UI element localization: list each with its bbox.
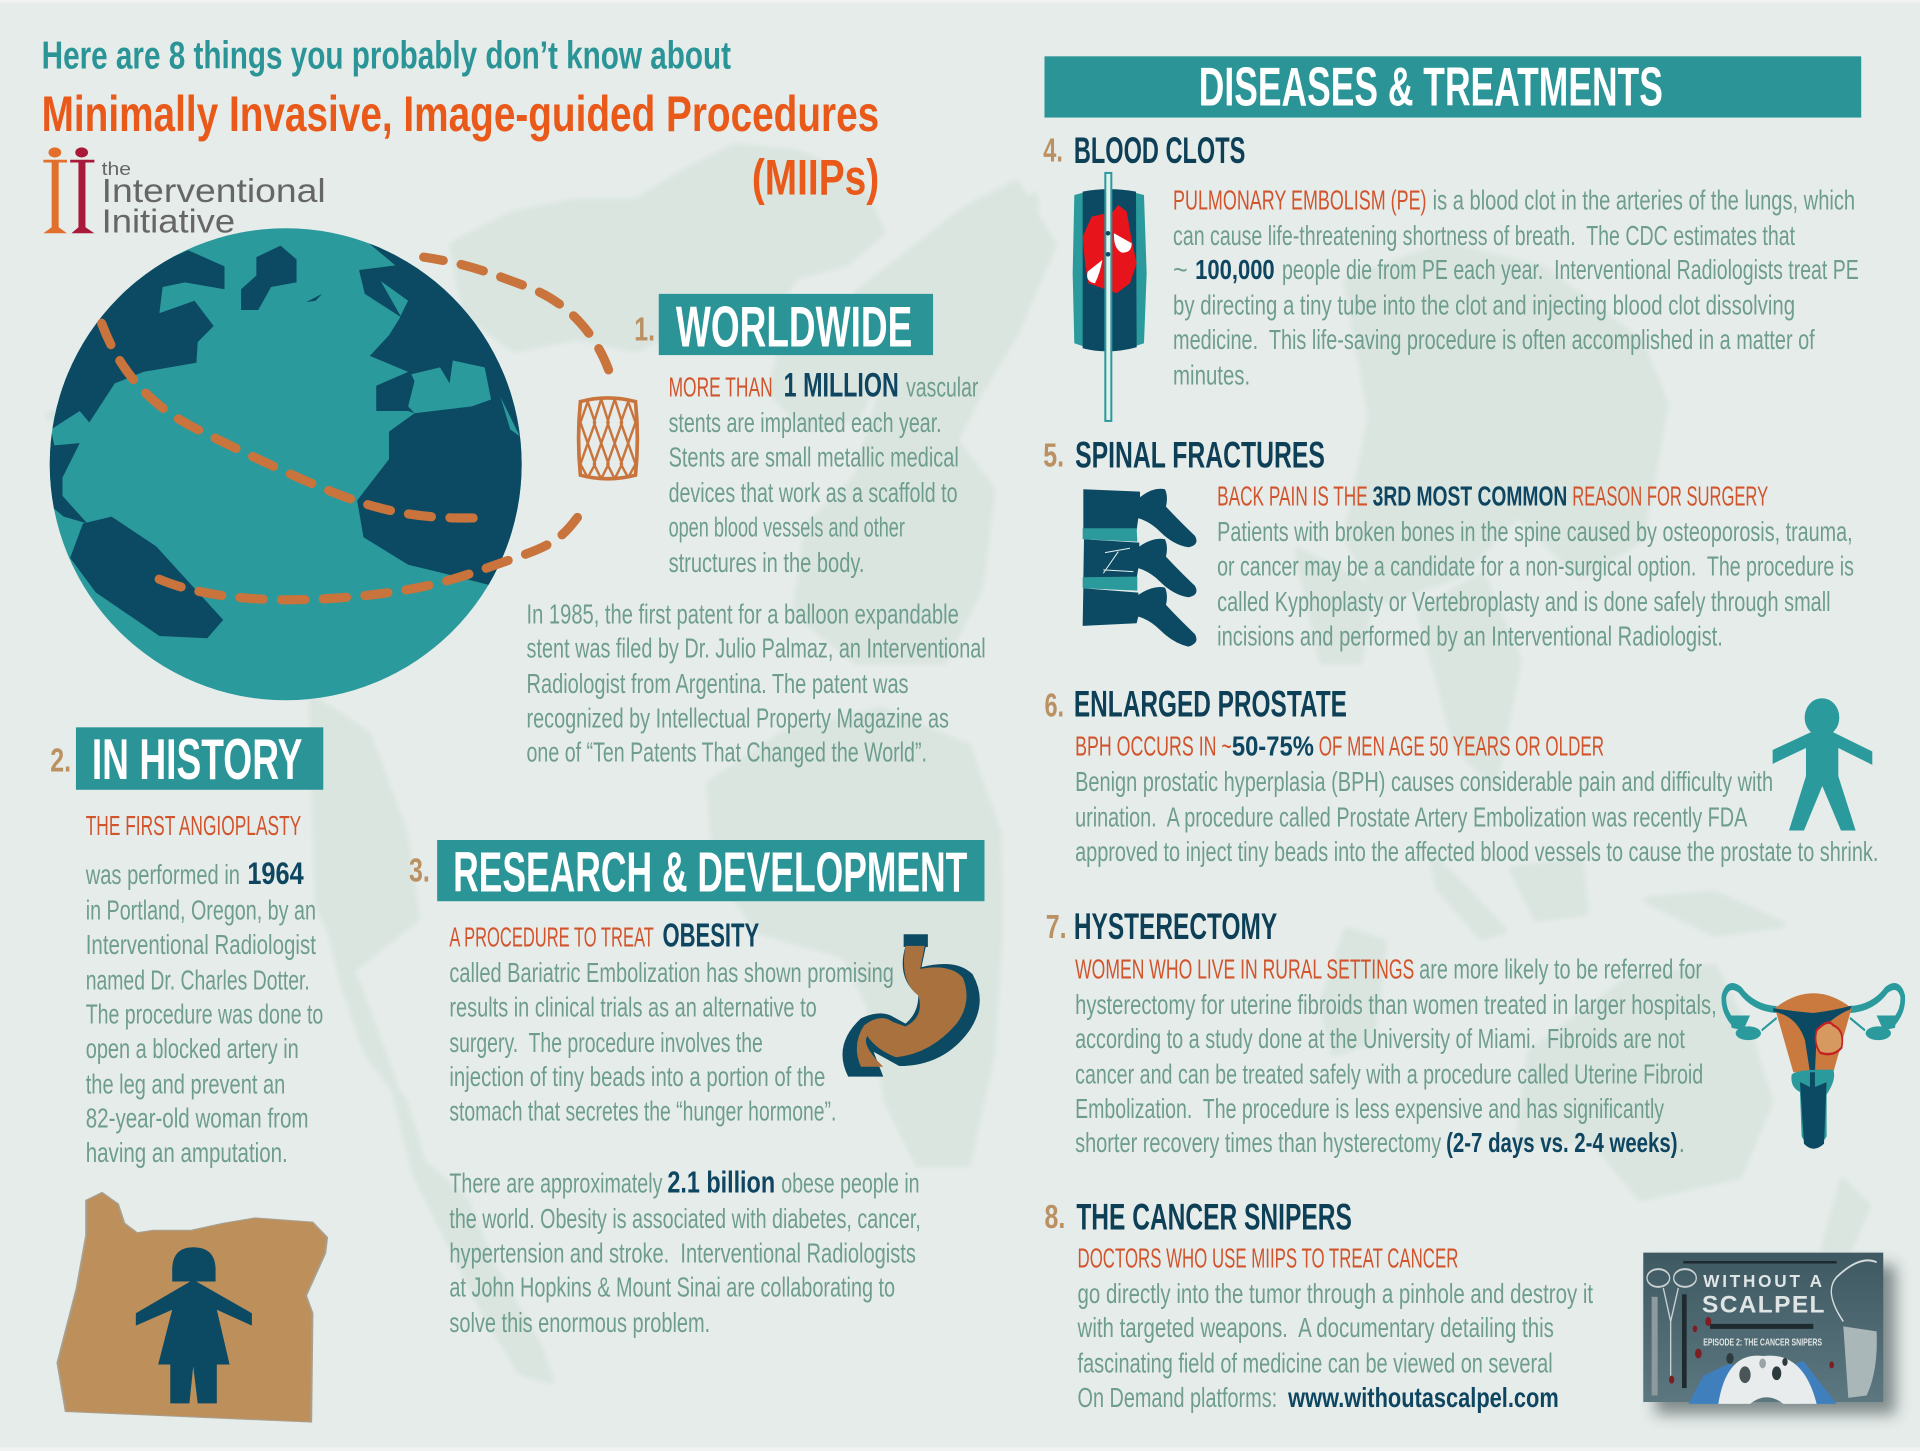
text block: rural settings: shorter recovery times than hysterectomy (1075, 1127, 1441, 1158)
text block: rural settings: . (1679, 1127, 1685, 1158)
text block: 2.1 billion: 2.1 billion (667, 1166, 775, 1200)
text block: back pain: REASON FOR SURGERY (1572, 481, 1768, 512)
text block: 2.1 billion: obese people in (781, 1168, 920, 1199)
logo: the Interventional Initiative: Interventional (102, 173, 326, 210)
banner: research and development: RESEARCH & DEVELOPMENT (453, 840, 967, 903)
icon: stomach (842, 934, 980, 1077)
icon: Oregon with woman figure (57, 1192, 327, 1422)
text block: stents: vascular (906, 372, 978, 403)
text block: angioplasty history: 82-year-old woman from (86, 1103, 309, 1134)
text block: angioplasty history (85, 855, 323, 1168)
panel: hysterectomy (1046, 906, 1903, 1158)
title line 3: (MIIPs) (752, 150, 879, 206)
text block: 2.1 billion: solve this enormous problem. (449, 1307, 710, 1338)
heading 6: ENLARGED PROSTATE (1074, 683, 1347, 724)
text block: documentary: DOCTORS WHO USE MIIPS TO TREAT CANCER (1078, 1242, 1458, 1273)
banner: in history (76, 727, 323, 792)
logo: the Interventional Initiative: the (102, 158, 131, 179)
heading 8 (1044, 1196, 1352, 1237)
text block: 2.1 billion: hypertension and stroke. Interventional Radiologists (449, 1237, 916, 1268)
text block: rural settings: (2-7 days vs. 2-4 weeks) (1446, 1127, 1678, 1158)
text block: documentary: On Demand platforms: (1078, 1382, 1277, 1413)
globe with stent route (26, 220, 609, 700)
text block: stents: MORE THAN (669, 372, 773, 403)
text block: pulmonary embolism (1173, 184, 1859, 390)
text block: documentary: fascinating field of medicine can be viewed on several (1078, 1348, 1553, 1379)
heading 6 (1044, 683, 1347, 724)
title block (42, 35, 879, 206)
heading 7: 7. (1046, 909, 1067, 946)
title line 2: Minimally Invasive, Image-guided Procedures (42, 86, 879, 142)
text block: 1985 patent: Radiologist from Argentina. The patent was (527, 668, 909, 699)
title line 1: Here are 8 things you probably don’t know about (42, 35, 731, 78)
text block: documentary: www.withoutascalpel.com (1287, 1382, 1559, 1413)
text block: rural settings (1075, 953, 1717, 1158)
text block: rural settings: WOMEN WHO LIVE IN RURAL SETTINGS (1075, 953, 1414, 984)
text block: pulmonary embolism: minutes. (1173, 359, 1250, 390)
text block: 2.1 billion: the world. Obesity is associated with diabetes, cancer, (449, 1203, 921, 1234)
section number 2: 2. (50, 742, 71, 779)
subhead: obesity: OBESITY (662, 918, 759, 955)
icon: catheter in clot (1073, 173, 1147, 421)
text block: angioplasty history: Interventional Radiologist (86, 929, 316, 960)
icon: spine (1083, 489, 1196, 647)
panel: spinal fractures (1043, 435, 1854, 651)
text block: bariatric embolization: results in clinical trials as an alternative to (449, 991, 817, 1022)
heading 4 (1043, 130, 1245, 171)
heading 7: HYSTERECTOMY (1074, 906, 1277, 947)
text block: stents: devices that work as a scaffold to (669, 477, 958, 508)
text block: angioplasty history: the leg and prevent an (86, 1068, 285, 1099)
documentary poster: Without a Scalpel: EPISODE 2: THE CANCER SNIPERS (1703, 1338, 1822, 1349)
panel: diseases and treatments banner: DISEASES & TREATMENTS (1199, 55, 1663, 117)
subhead: obesity: A PROCEDURE TO TREAT (449, 922, 654, 953)
text block: pulmonary embolism: 100,000 (1195, 254, 1275, 285)
documentary poster: Without a Scalpel (1643, 1253, 1895, 1414)
logo: the Interventional Initiative: Initiative (102, 204, 235, 241)
text block: stents (669, 367, 978, 578)
documentary poster: Without a Scalpel: SCALPEL (1702, 1292, 1825, 1319)
panel: enlarged prostate (1044, 683, 1878, 867)
text block: bariatric embolization: surgery. The procedure involves the (449, 1027, 763, 1058)
text block: 1985 patent: one of “Ten Patents That Changed the World”. (527, 737, 927, 768)
section number 1: 1. (634, 311, 655, 348)
logo: the Interventional Initiative (43, 147, 326, 241)
text block: stents: open blood vessels and other (669, 511, 905, 542)
text block: angioplasty history: having an amputation. (86, 1137, 288, 1168)
text block: stents: Stents are small metallic medical (669, 442, 959, 473)
heading 4: BLOOD CLOTS (1074, 130, 1245, 171)
text block: angioplasty history: 1964 (247, 855, 304, 891)
text block: stents: 1 MILLION (784, 367, 899, 405)
panel: research and development (409, 840, 984, 1338)
panel: blood clots (1043, 130, 1859, 421)
text block: BPH: OF MEN AGE 50 YEARS OR OLDER (1319, 730, 1604, 761)
text block: 2.1 billion: at John Hopkins & Mount Sinai are collaborating to (449, 1272, 895, 1303)
text block: stents: stents are implanted each year. (669, 407, 942, 438)
text block: 1985 patent (527, 598, 986, 768)
panel: worldwide (527, 294, 986, 768)
text block: documentary: go directly into the tumor through a pinhole and destroy it (1078, 1278, 1593, 1309)
heading 4: 4. (1043, 133, 1063, 170)
text block: rural settings: according to a study done at the University of Miami. Fibroids are not (1075, 1023, 1685, 1054)
icon: male figure (1773, 698, 1872, 830)
text block: 2.1 billion (449, 1166, 921, 1338)
text block: pulmonary embolism: ~ (1173, 254, 1188, 285)
heading 5 (1043, 435, 1325, 476)
text block: bariatric embolization (449, 957, 894, 1126)
dashed route (102, 257, 609, 600)
heading 5: SPINAL FRACTURES (1075, 435, 1325, 476)
section number 3: 3. (409, 853, 430, 890)
text block: back pain: 3RD MOST COMMON (1373, 481, 1567, 512)
text block: back pain: incisions and performed by an Interventional Radiologist. (1217, 620, 1723, 651)
heading 8: THE CANCER SNIPERS (1076, 1196, 1352, 1237)
text block: 1985 patent: In 1985, the first patent for a balloon expandable (527, 598, 959, 629)
text block: angioplasty history: in Portland, Oregon, by an (86, 895, 316, 926)
text block: angioplasty history: named Dr. Charles Dotter. (86, 964, 310, 995)
heading 7 (1046, 906, 1277, 947)
banner: worldwide: WORLDWIDE (676, 296, 912, 360)
text block: 1985 patent: recognized by Intellectual Property Magazine as (527, 702, 949, 733)
text block: documentary (1077, 1242, 1593, 1413)
text block: BPH: BPH OCCURS IN ~ (1075, 730, 1232, 761)
text block: documentary: with targeted weapons. A documentary detailing this (1077, 1312, 1554, 1343)
text block: rural settings: Embolization. The procedure is less expensive and has significantly (1075, 1093, 1664, 1124)
heading 6: 6. (1044, 687, 1064, 724)
text block: rural settings: are more likely to be referred for (1419, 953, 1702, 984)
text block: BPH: 50-75% (1232, 730, 1314, 761)
banner: research and development (437, 840, 984, 903)
text block: bariatric embolization: stomach that secretes the “hunger hormone”. (449, 1095, 836, 1126)
text block: 1985 patent: stent was filed by Dr. Julio Palmaz, an Interventional (527, 633, 986, 664)
text block: angioplasty history: The procedure was done to (86, 999, 323, 1030)
text block: angioplasty history: was performed in (85, 859, 240, 890)
panel: in history (50, 727, 327, 1422)
text block: stents: structures in the body. (669, 547, 864, 578)
banner: in history: IN HISTORY (92, 728, 302, 792)
text block: bariatric embolization: called Bariatric Embolization has shown promising (449, 957, 894, 988)
text block: pulmonary embolism: PULMONARY EMBOLISM (PE) (1173, 184, 1427, 215)
documentary poster: Without a Scalpel: WITHOUT A (1703, 1271, 1822, 1291)
text block: bariatric embolization: injection of tiny beads into a portion of the (449, 1061, 825, 1092)
heading 5: 5. (1043, 438, 1064, 475)
text block: 2.1 billion: There are approximately (449, 1168, 663, 1199)
text block: back pain (1217, 481, 1854, 651)
heading 8: 8. (1044, 1199, 1065, 1236)
text block: angioplasty history: open a blocked artery in (86, 1033, 299, 1064)
subhead: first angioplasty: THE FIRST ANGIOPLASTY (86, 810, 301, 841)
banner: worldwide (659, 294, 933, 360)
text block: BPH (1075, 730, 1878, 867)
text block: back pain: BACK PAIN IS THE (1217, 481, 1368, 512)
panel: the cancer snipers (1044, 1196, 1895, 1414)
icon: uterus with fibroid (1724, 987, 1903, 1149)
icon: stent (579, 398, 637, 479)
